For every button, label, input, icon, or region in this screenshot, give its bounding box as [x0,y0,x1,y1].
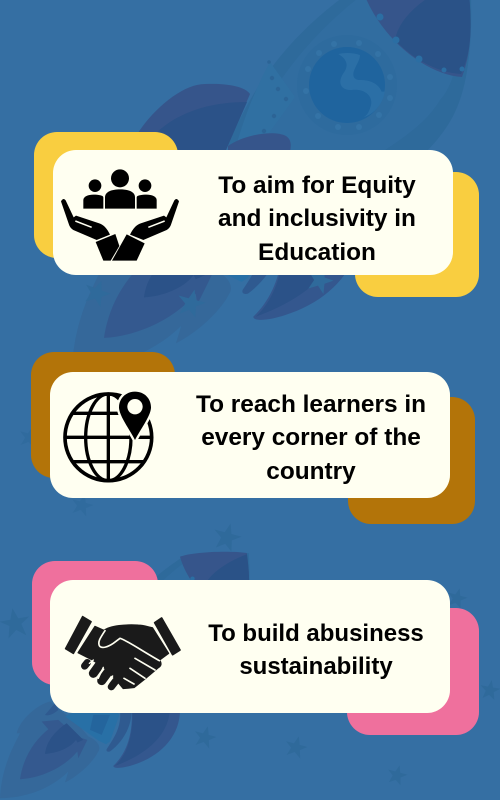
icon: handshake [64,616,181,690]
ochre block left [31,352,175,478]
rivets [303,40,393,130]
flames and fins [72,214,360,368]
icon: people held in hands [61,169,179,261]
card [50,372,450,498]
yellow block left [34,132,178,258]
pink block right [347,608,479,735]
text: sustainability [239,653,393,680]
rocket body [228,0,471,215]
icon: globe with pin [63,392,154,482]
porthole [297,35,397,135]
panel: business sustainability [32,561,479,735]
inner flame [104,243,212,338]
text: country [266,458,356,485]
lower rocket [0,552,250,798]
nose cone [360,0,471,77]
text: To reach learners in [196,391,426,418]
pink block left [32,561,158,685]
text [218,172,416,266]
panel: equity and inclusivity [34,132,479,297]
stars [0,263,500,786]
text [196,391,426,485]
panel: reach learners [31,352,475,524]
text: Education [258,239,376,266]
yellow block right [355,172,479,297]
text: every corner of the [201,424,421,451]
text: and inclusivity in [218,205,416,232]
upper rocket [72,0,471,368]
text [208,620,424,680]
ochre block right [348,397,475,524]
text: To build abusiness [208,620,424,647]
card [53,150,453,275]
fin slivers [242,227,283,294]
left fin [128,84,250,150]
card [50,580,450,713]
text: To aim for Equity [218,172,416,199]
nozzle [176,227,263,282]
outer flame [72,214,231,368]
